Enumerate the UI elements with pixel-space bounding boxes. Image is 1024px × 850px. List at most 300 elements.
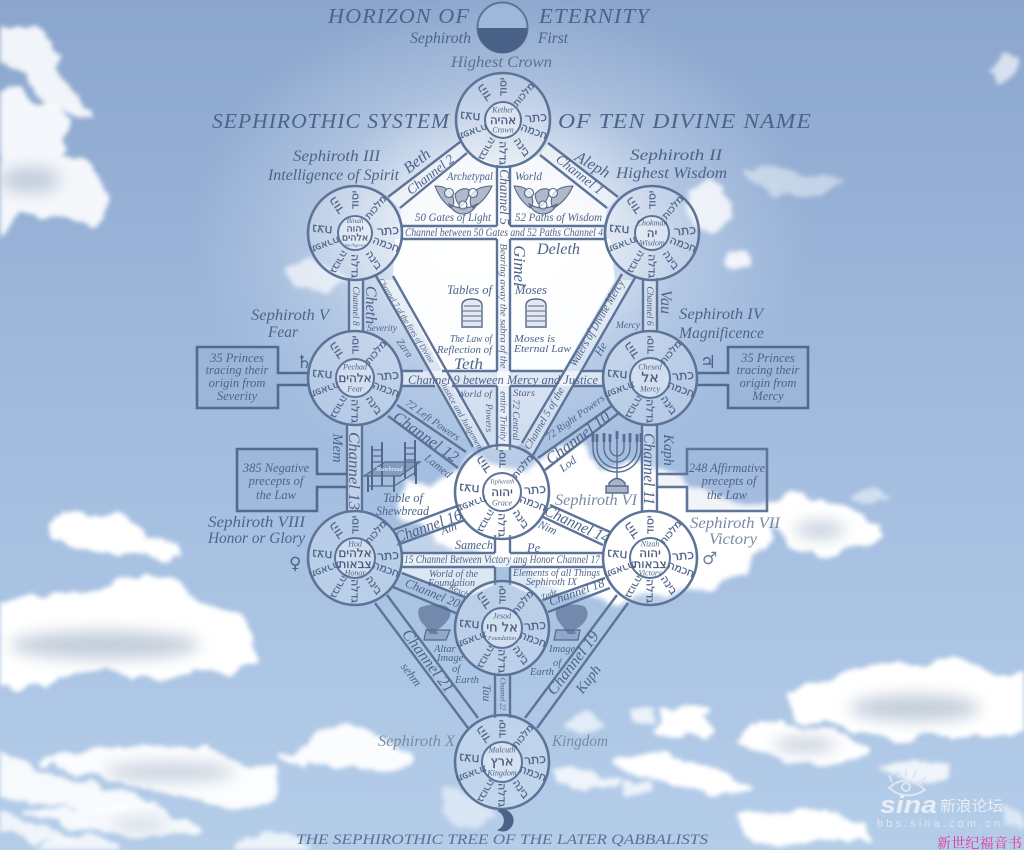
labels: Sephiroth X Kingdom: Kingdom: [551, 733, 608, 750]
box: 385 Negative precepts: precepts of: [248, 474, 305, 488]
labels: channel 9 and central worlds: Channel 9 between Mercy and Justice: [408, 373, 598, 387]
labels: tables and moses: Tables of: [447, 283, 494, 297]
sephirah circle: Malcuth: ארץ: [490, 754, 514, 770]
icon: venus symbol: ♀: [289, 554, 301, 574]
labels: Sephiroth V and IV: Sephiroth IV: [679, 306, 765, 323]
labels: tables and moses: Moses: [514, 283, 547, 297]
watermark: sina logo: bbs.sina.com.cn: [877, 818, 1000, 830]
labels: lower sephiroth names: Sephiroth VIII: [208, 514, 306, 531]
labels: foundation worlds: Channel 20: [403, 576, 463, 611]
heading: Sephirothic system of ten divine name: SEPHIROTHIC SYSTEM: [212, 109, 451, 133]
sephirah circle: Jesod: בינה: [510, 643, 532, 667]
labels: tables and moses: Teth: [454, 356, 483, 373]
box: 385 Negative precepts: 385 Negative: [242, 461, 310, 475]
labels: altar and earth: Earth: [454, 675, 479, 686]
sephirah circle: Binah: Binah: [347, 217, 364, 225]
labels: channels 7 and 8: Zara: [394, 337, 414, 360]
labels: supernal triad field: Bearing away the sabra of the: [498, 244, 508, 368]
box: 35 Princes, Mercy: tracing their: [737, 363, 800, 377]
labels: altar and earth: Altar: [433, 644, 456, 655]
sephirah circle: Binah: כתר: [376, 222, 399, 239]
sephirah circle: Chesed: Chesed: [638, 362, 663, 372]
sephirah circle: Tiphereth: גבורה: [475, 507, 496, 534]
sephirah circle: Chesed: נצח: [606, 367, 628, 383]
labels: upper sephiroth names: [267, 146, 727, 198]
box: 35 Princes, Mercy: [697, 347, 808, 408]
labels: channels 7 and 8: [350, 276, 437, 365]
labels: channels 11 and 13: Mem: [329, 432, 345, 462]
icon: angels right: [514, 186, 573, 214]
icon: tablets of law left: [462, 299, 482, 327]
sephirah circle: Chesed: אל: [641, 370, 659, 386]
sephirah circle: Kether: אהיה: [490, 113, 516, 127]
sephirah circle: Kether: [455, 73, 550, 167]
sephirah circle: Tiphereth: תפארת: [454, 493, 488, 514]
title: Horizon of Eternity: HORIZON OF: [327, 4, 470, 28]
sephirah circle: Pechad: נצח: [311, 367, 333, 383]
sephirah circle: Tiphereth: גדלה: [496, 513, 508, 537]
labels: channels 7 and 8: Cheth: [362, 286, 379, 324]
sephirah circle: Binah: תפארת: [307, 234, 341, 255]
sephirah circle: Hod: צבאות: [338, 557, 372, 571]
sephirah circle: Binah: נצח: [311, 222, 333, 238]
sephirah circle: Pechad: מלכות: [363, 339, 389, 367]
sephirah circle: Binah: אלהים: [342, 232, 368, 244]
icon: angels left: [435, 186, 492, 214]
sephirah circle: Malcuth: מלכות: [510, 723, 536, 751]
labels: supernal triad field: Archetypal: [446, 171, 493, 183]
sephirah circle: Nizah: יסוד: [644, 516, 656, 534]
icon: half-filled horizon circle: [478, 2, 528, 53]
sephirah circle: Binah: הוד: [325, 194, 347, 218]
labels: foundation worlds: Channel 18: [547, 575, 607, 609]
sephirah circle: Nizah: חכמה: [666, 558, 696, 580]
sephirah circle: Chokmah: הוד: [622, 194, 644, 218]
labels: Sephiroth V and IV: Sephiroth V: [251, 307, 331, 324]
sephirah circle: Chesed: גדלה: [644, 399, 656, 423]
labels: channels 11 and 13: Channel 13: [345, 432, 362, 510]
label: Highest Crown: Highest Crown: [450, 54, 552, 71]
sephirah circle: Kether: חכמה: [519, 120, 549, 142]
sephirah circle: Hod: חכמה: [371, 558, 401, 580]
sephirah circle: Malcuth: Malcuth: [488, 746, 515, 754]
sephirah circle: Hod: מלכות: [363, 519, 389, 547]
box: 35 Princes, Mercy: origin from: [740, 376, 796, 390]
sephirah circle: Pechad: גדלה: [348, 399, 362, 423]
sephirah circle: Hod: בינה: [363, 573, 385, 597]
icon: jupiter symbol: ♃: [700, 352, 716, 373]
sephirah circle: Tiphereth: הוד: [472, 453, 494, 477]
sephirah circle: Binah: בינה: [363, 248, 385, 272]
sephirah circle: Pechad: [307, 331, 402, 425]
labels: channel 6 and mercy: He: [592, 341, 610, 359]
labels: upper sephiroth names: Aleph: [571, 148, 613, 182]
sephirah circle: Nizah: יהוה: [639, 546, 661, 560]
sephirah circle: Tiphereth: יהוה: [491, 485, 513, 499]
sephirah circle: Chesed: כתר: [671, 367, 694, 384]
labels: channels 14 to 17: 15 Channel Between Victory ang Honor Channel 17: [404, 554, 601, 566]
watermark: sina logo: [877, 769, 1003, 830]
labels: altar and earth: of: [553, 658, 563, 669]
sephirah circle: Nizah: גדלה: [644, 579, 656, 603]
sephirah circle: Malcuth: בינה: [510, 777, 532, 801]
sephirah circle: Tiphereth: [454, 445, 549, 539]
labels: channel 9 and central worlds: Stars: [513, 389, 535, 399]
sephirah circle: Nizah: בינה: [658, 573, 680, 597]
icon: altar left: [418, 604, 451, 640]
labels: channels 14 to 17: Pe: [526, 541, 541, 555]
sephirah circle: Malcuth: תפארת: [454, 763, 488, 784]
label: Sephiroth First: [410, 30, 569, 47]
sephirah circle: Nizah: כתר: [671, 547, 694, 564]
sephirah circle: Jesod: [454, 581, 549, 675]
sephirah circle: Malcuth: גדלה: [496, 783, 508, 807]
sephirah circle: Malcuth: גבורה: [475, 777, 496, 804]
labels: upper sephiroth names: Highest Wisdom: [615, 165, 727, 182]
sephirah circle: Chokmah: [604, 186, 699, 280]
labels: channels 14 to 17: Channel 14: [542, 502, 612, 547]
sephirah circle: Malcuth: נצח: [458, 751, 480, 767]
labels: foundation worlds: World of the: [429, 569, 478, 580]
labels: channels 10 and 12: Lamed: [421, 452, 454, 481]
sephirah circle: Nizah: תפארת: [602, 559, 636, 580]
labels: upper sephiroth names: Intelligence of Spirit: [267, 167, 400, 184]
icon: crescent moon: [497, 810, 514, 832]
labels: tables and moses: Moses is: [513, 334, 555, 345]
icon: table of shewbread: [364, 440, 420, 492]
sephirah circle: Malcuth: הוד: [472, 723, 494, 747]
box: 35 Princes, Severity: [197, 347, 310, 408]
sephirah circle: Pechad: בינה: [363, 393, 385, 417]
sephirah circle: Hod: גבורה: [328, 573, 349, 600]
icon: saturn symbol: ♄: [296, 352, 312, 373]
sephirah circle: Kether: Crown: [492, 126, 514, 134]
footer title: THE SEPHIROTHIC TREE OF THE LATER QABBALISTS: [296, 832, 709, 848]
sephirah circle: Jesod: הוד: [472, 589, 494, 613]
sephirah circle: Malcuth: כתר: [523, 751, 546, 768]
sephirah circle: Hod: הוד: [325, 519, 347, 543]
labels: lower sephiroth names: Victory: [709, 531, 758, 548]
sephirah circle: Malcuth: יסוד: [496, 720, 508, 738]
labels: tables and moses: [436, 283, 571, 373]
labels: channels 14 to 17: [393, 502, 612, 566]
labels: channels 10 and 12: Lod: [557, 454, 579, 475]
sephirah circle: Nizah: מלכות: [658, 519, 684, 547]
sephirah circle: Kether: הוד: [473, 81, 495, 105]
labels: channels 19 21 22: sehm: [398, 660, 425, 689]
sephirah circle: Chokmah: גבורה: [625, 248, 646, 275]
sephirah circle: Hod: גדלה: [348, 579, 362, 603]
box: 248 Affirmative precepts: [657, 449, 767, 511]
sephirah circle: Chesed: Mercy: [639, 384, 661, 394]
box: 35 Princes, Severity: Severity: [217, 389, 258, 403]
sephirah circle: Nizah: נצח: [606, 547, 628, 563]
labels: channels 7 and 8: Channel 8: [350, 286, 360, 326]
icon: table of shewbread: Shewbread: [376, 467, 403, 473]
label: table of shewbread: [376, 491, 430, 518]
sephirah circle: Jesod: חכמה: [518, 628, 548, 650]
channels network: [347, 142, 657, 728]
box: 35 Princes, Severity: origin from: [209, 376, 265, 390]
sephirah circle: Tiphereth: יסוד: [496, 450, 508, 468]
sephirah circle: Chokmah: יה: [647, 226, 657, 240]
sephirah circle: Jesod: Jesod: [493, 612, 512, 620]
sephirah circle: Chesed: גבורה: [623, 393, 644, 420]
sephirah circle: Pechad: כתר: [376, 367, 399, 384]
labels: upper sephiroth names: Channel 2: [404, 151, 457, 198]
box: 248 Affirmative precepts: 248 Affirmative: [689, 461, 765, 475]
labels: altar and earth: Image: [548, 644, 576, 655]
labels: channels 11 and 13: [329, 432, 676, 510]
sephirah circle: Nizah: [602, 511, 697, 605]
labels: foundation worlds: Sephiroth IX: [526, 577, 578, 588]
labels: channel 9 and central worlds: Powers: [483, 403, 493, 433]
sephirah circle: Kether: Kether: [491, 106, 515, 114]
labels: tables and moses: Eternal Law: [513, 344, 571, 355]
watermark: sina logo: sina: [880, 792, 937, 819]
labels: channels 19 21 22: Channel 22: [498, 678, 506, 711]
labels: channel 9 and central worlds: Justice and Judgement: [439, 380, 487, 453]
sephirah circle: Pechad: הוד: [325, 339, 347, 363]
sephirah circle: Hod: Hod: [347, 540, 363, 548]
sephirah circle: Chesed: מלכות: [658, 339, 684, 367]
labels: channel 6 and mercy: Waters of Divine Mercy: [566, 277, 627, 369]
label: table of shewbread: Shewbread: [376, 504, 430, 518]
labels: channels 7 and 8: Severity: [367, 324, 398, 334]
label: table of shewbread: Table of: [383, 491, 425, 505]
sephirah circle: Kether: בינה: [511, 135, 533, 159]
sephirah circle: Chokmah: תפארת: [604, 234, 638, 255]
sephirah circle: Jesod: Foundation: [487, 636, 516, 642]
heading: Sephirothic system of ten divine name: [212, 109, 812, 133]
labels: altar and earth: of: [452, 664, 462, 675]
labels: channels 19 21 22: [398, 626, 605, 711]
labels: channels 10 and 12: Channel 10: [543, 409, 614, 468]
labels: supernal triad field: 52 Paths of Wisdom: [515, 212, 602, 224]
labels: channels 10 and 12: [390, 393, 614, 481]
sephirah circle: Malcuth: [454, 715, 549, 809]
labels: channel 6 and mercy: [566, 277, 674, 369]
sephirah circle: Kether: גבורה: [476, 135, 497, 162]
sephirah circle: Chokmah: Wisdom: [639, 238, 665, 248]
sephirah circle: Chokmah: מלכות: [660, 194, 686, 222]
sephirah circle: Chesed: יסוד: [644, 336, 656, 354]
box: 35 Princes, Mercy: 35 Princes: [740, 351, 795, 365]
sephirah circle: Nizah: Victory: [639, 568, 662, 578]
sephirah circle: Binah: Intelligence: [343, 242, 366, 248]
labels: supernal triad field: Channel 5: [497, 169, 512, 225]
sephirah circle: Jesod: גדלה: [496, 649, 508, 673]
labels: lower sephiroth names: Sephiroth VI: [555, 492, 638, 509]
labels: channels 10 and 12: Channel 12: [390, 409, 462, 466]
sephirah circle: Tiphereth: בינה: [510, 507, 532, 531]
labels: channels 11 and 13: Kaph: [660, 433, 676, 466]
labels: channels 14 to 17: Channel 16: [393, 507, 464, 547]
labels: upper sephiroth names: Channel 1: [553, 151, 606, 198]
labels: foundation worlds: [403, 568, 607, 611]
sephirah circle: Nizah: Nizah: [640, 540, 659, 548]
labels: channel 9 and central worlds: entire Trinity: [498, 391, 508, 442]
labels: altar and earth: Image: [436, 653, 464, 664]
icon: tablets of law right: [526, 299, 546, 327]
sephirah circle: Kether: גדלה: [496, 141, 510, 165]
sephirah circle: Chokmah: כתר: [673, 222, 696, 239]
labels: foundation worlds: Resch: [447, 581, 471, 599]
sephirah circle: Kether: נצח: [459, 109, 481, 125]
sephirah circle: Kether: מלכות: [511, 81, 537, 109]
labels: channels 19 21 22: Channel 21: [398, 626, 457, 696]
sephirah circle: Hod: יסוד: [348, 516, 362, 534]
labels: channels 7 and 8: Channel 7 of the fires of Divine: [376, 276, 437, 365]
sephirah circle: Malcuth: Kingdom: [486, 768, 517, 778]
sephirah circle: Binah: גבורה: [328, 248, 349, 275]
box: 248 Affirmative precepts: precepts of: [701, 474, 758, 488]
labels: channel 6 and mercy: Vau: [657, 290, 674, 314]
title: Horizon of Eternity: [327, 4, 651, 28]
sephirah circle: Tiphereth: Grace: [492, 498, 512, 508]
labels: supernal triad field: Gimel: [510, 245, 529, 287]
labels: channels 14 to 17: Nim: [535, 518, 558, 538]
sephirah circle: Jesod: נצח: [458, 617, 480, 633]
sephirah circle: Nizah: גבורה: [623, 573, 644, 600]
box: 385 Negative precepts: the Law: [256, 488, 297, 502]
labels: altar and earth: [433, 644, 576, 686]
sephirah circle: Tiphereth: Tiphereth: [490, 478, 514, 486]
labels: tables and moses: The Law of: [450, 334, 494, 345]
heading: Sephirothic system of ten divine name: OF TEN DIVINE NAME: [558, 109, 812, 133]
labels: channel 9 and central worlds: 72 Central: [510, 400, 520, 441]
icon: altar right: [554, 604, 588, 640]
box: 35 Princes, Severity: 35 Princes: [209, 351, 264, 365]
sephirah circle: Jesod: אל חי: [486, 620, 518, 636]
sephirah circle: Tiphereth: כתר: [523, 481, 546, 498]
sephirah circle: Tiphereth: מלכות: [510, 453, 536, 481]
labels: Sephiroth V and IV: [251, 306, 765, 342]
labels: lower sephiroth names: Sephiroth VII: [690, 515, 781, 532]
icon: mars symbol: ♂: [702, 549, 717, 569]
labels: channel 9 and central worlds: Channel 5 of the: [523, 386, 567, 452]
labels: channel 9 and central worlds: [408, 373, 598, 453]
sephirah circle: Kether: כתר: [524, 109, 547, 126]
label: Sephiroth First: First: [537, 30, 569, 47]
panel: bright interior fields of the tree: [347, 142, 657, 600]
sephirah circle: Pechad: תפארת: [307, 379, 341, 400]
sephirah circle: Pechad: חכמה: [371, 378, 401, 400]
title: Horizon of Eternity: ETERNITY: [538, 4, 651, 28]
sephirah circle: Jesod: גבורה: [475, 643, 496, 670]
sephirah circle: Hod: תפארת: [307, 559, 341, 580]
labels: foundation worlds: Zade: [539, 586, 559, 602]
sephirah circle: Hod: Honor: [344, 568, 366, 578]
sephirah circle: Jesod: יסוד: [496, 586, 508, 604]
labels: channels 10 and 12: 72 Left Powers: [403, 398, 462, 444]
sephirah circle: Jesod: מלכות: [510, 589, 536, 617]
sephirah circle: Pechad: יסוד: [348, 336, 362, 354]
sephirah circle: Binah: חכמה: [371, 233, 401, 255]
sephirah circle: Binah: [307, 186, 402, 280]
labels: Sephiroth X Kingdom: Sephiroth X: [378, 733, 456, 750]
labels: channels 14 to 17: Samech: [455, 538, 493, 552]
labels: channels 11 and 13: Channel 11: [640, 433, 657, 505]
labels: Sephiroth V and IV: Fear: [267, 324, 299, 341]
sephirah circle: Binah: גדלה: [348, 254, 362, 278]
sephirah circle: Chokmah: יסוד: [646, 191, 658, 209]
labels: lower sephiroth names: Honor or Glory: [207, 530, 306, 547]
sephirah circle: Chokmah: גדלה: [646, 254, 658, 278]
sephirah circle: Binah: יסוד: [348, 191, 362, 209]
labels: channels 19 21 22: Channel 19: [544, 628, 603, 698]
sephirah circle: Malcuth: חכמה: [518, 762, 548, 784]
sephirah circle: Jesod: כתר: [523, 617, 546, 634]
sephirah circle: Binah: מלכות: [363, 194, 389, 222]
sephirah circle: Nizah: צבאות: [633, 557, 667, 571]
sephirah circle: Binah: יהוה: [346, 224, 364, 234]
labels: Sephiroth V and IV: Magnificence: [678, 325, 764, 342]
box: 385 Negative precepts: [237, 449, 347, 511]
sephirah circle: Kether: יסוד: [496, 78, 510, 96]
sephirah circle: Nizah: הוד: [620, 519, 642, 543]
sephirah circle: Kether: תפארת: [455, 121, 489, 142]
sephirah circle: Chesed: בינה: [658, 393, 680, 417]
sephirah circle: Chesed: תפארת: [602, 379, 636, 400]
labels: supernal triad field: World: [515, 171, 542, 183]
sephirah circle: Pechad: גבורה: [328, 393, 349, 420]
box: 248 Affirmative precepts: the Law: [707, 488, 748, 502]
sephirah circle: Hod: אלהים: [338, 546, 372, 560]
labels: channels 19 21 22: Kuph: [572, 662, 605, 698]
labels: supernal triad field: 50 Gates of Light: [415, 212, 492, 224]
labels: channels 14 to 17: Ain: [438, 521, 459, 538]
labels: channel 9 and central worlds: World of: [457, 389, 493, 400]
labels: supernal triad field: Channel between 50 Gates and 52 Paths Channel 4: [405, 227, 603, 239]
icon: menorah: [593, 431, 641, 493]
sephirah circle: Chokmah: בינה: [660, 248, 682, 272]
labels: altar and earth: Earth: [529, 667, 554, 678]
sephirah circle: Hod: [307, 511, 402, 605]
watermark: sina logo: 新浪论坛: [940, 798, 1003, 815]
sephirah circle: Pechad: Pechad: [342, 362, 368, 372]
sun glow: [190, 0, 810, 480]
sephirah circle: Hod: נצח: [311, 547, 333, 563]
labels: foundation worlds: Elements of all Things: [512, 568, 600, 579]
sephirah circle: Chesed: הוד: [620, 339, 642, 363]
labels: upper sephiroth names: Beth: [400, 146, 434, 177]
box: 35 Princes, Severity: tracing their: [206, 363, 269, 377]
labels: tables and moses: Reflection of: [436, 345, 494, 356]
labels: upper sephiroth names: Sephiroth III: [293, 148, 381, 165]
labels: channel 6 and mercy: Mercy: [615, 321, 641, 331]
labels: channels 10 and 12: 72 Right Powers: [544, 393, 607, 443]
sephirah circle: Tiphereth: חכמה: [518, 492, 548, 514]
sephirah circle: Jesod: תפארת: [454, 629, 488, 650]
sephirah circle: Chokmah: נצח: [608, 222, 630, 238]
labels: lower sephiroth names: [207, 492, 781, 548]
sephirah circle: Hod: כתר: [376, 547, 399, 564]
sephirah circle: Chokmah: חכמה: [668, 233, 698, 255]
labels: supernal triad field: [405, 169, 603, 368]
sephirah circle: Chokmah: Chokman: [637, 218, 667, 228]
labels: supernal triad field: Deleth: [536, 241, 580, 258]
labels: Sephiroth X Kingdom: [378, 733, 608, 750]
labels: foundation worlds: Foundation: [427, 578, 475, 589]
sephirah circle: Chesed: חכמה: [666, 378, 696, 400]
sephirah circle: Chesed: [602, 331, 697, 425]
sephirah circle: Pechad: Fear: [346, 384, 364, 394]
labels: upper sephiroth names: Sephiroth II: [630, 147, 723, 164]
sephirah circle: Tiphereth: נצח: [458, 481, 480, 497]
labels: channels 19 21 22: Tau: [480, 685, 492, 702]
sephirah circle: Pechad: אלהים: [338, 371, 372, 385]
